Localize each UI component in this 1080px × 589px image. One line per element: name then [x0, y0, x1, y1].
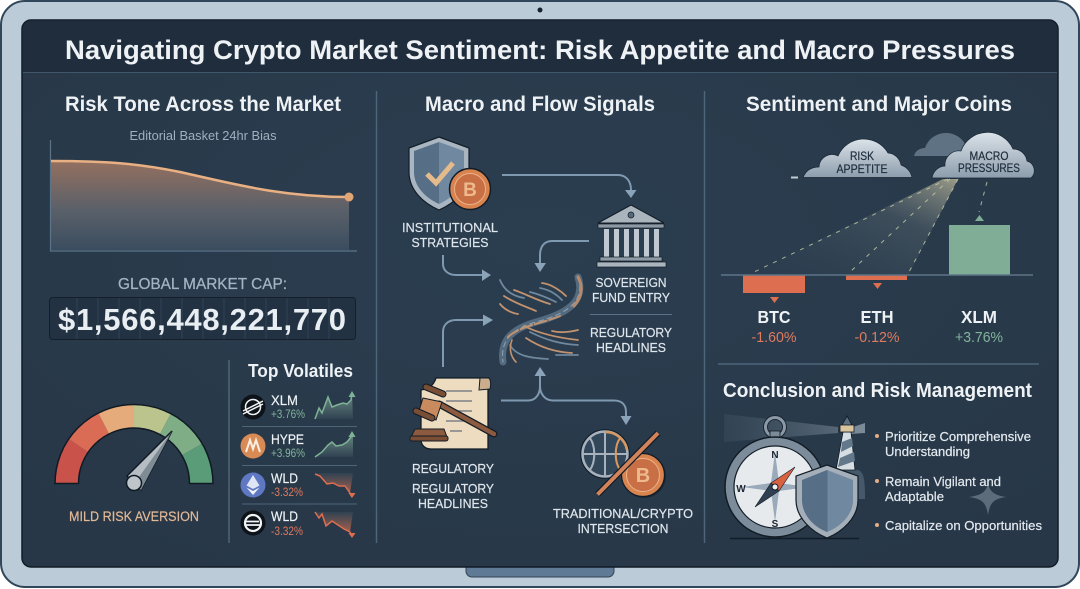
row: WLD globe icon: WLD [271, 508, 298, 524]
icon: shield with bitcoin [409, 137, 490, 210]
label: institutional strategies [402, 220, 498, 250]
coin: ETH [854, 307, 900, 346]
label: sovereign fund entry: FUND ENTRY [592, 290, 670, 305]
bullet list: Remain Vigilant and [885, 474, 1001, 489]
bullet list: Capitalize on Opportunities [885, 518, 1042, 533]
icon: cloud risk appetite: RISK [850, 151, 874, 163]
coin: BTC: -1.60% [752, 329, 796, 346]
heading: top volatiles: Top Volatiles [248, 361, 353, 381]
label: traditional/crypto intersection [553, 506, 693, 536]
chart subtitle: Editorial Basket 24hr Bias [130, 129, 276, 143]
gauge label: MILD RISK AVERSION [69, 509, 199, 524]
global market cap value: $1,566,448,221,770 [58, 302, 346, 337]
arrow: institutional to sovereign [502, 175, 636, 198]
heading: sentiment: Sentiment and Major Coins [746, 93, 1012, 116]
label: regulatory: REGULATORY [412, 461, 494, 476]
panel: risk tone across the market [50, 93, 357, 543]
bullet list: Understanding [885, 444, 970, 459]
icon: shield with bitcoin: B [463, 180, 477, 201]
row: XLM: XLM [271, 392, 298, 408]
coin: ETH: ETH [860, 307, 894, 327]
row: XLM: +3.76% [271, 409, 305, 421]
label: regulatory headlines (left) [412, 481, 494, 511]
icon: compass, lighthouse and shield [724, 414, 865, 538]
row: HYPE [240, 431, 356, 460]
gauge: mild risk aversion [55, 404, 213, 490]
label: traditional/crypto intersection: TRADITIONAL/CRYPTO [553, 506, 693, 521]
bullet list [875, 429, 1042, 533]
label: traditional/crypto intersection: INTERSECTION [578, 521, 668, 536]
label: regulatory headlines (right) [590, 325, 672, 355]
arrow: regulatory to center [443, 314, 493, 367]
arrow: sovereign to center [534, 241, 589, 272]
beam from macro cloud [750, 179, 958, 274]
decorative star mark [969, 484, 1006, 515]
heading: risk tone: Risk Tone Across the Market [65, 93, 341, 116]
icon: compass, lighthouse and shield: N [771, 450, 779, 461]
row: WLD ethereum icon: WLD [271, 470, 298, 486]
heading: macro and flow: Macro and Flow Signals [425, 93, 655, 116]
global market cap label: GLOBAL MARKET CAP: [118, 276, 287, 293]
row: WLD ethereum icon [240, 470, 356, 499]
arrow: regulatory to center and intersection [501, 367, 632, 425]
label: institutional strategies: STRATEGIES [412, 235, 489, 250]
coin: XLM: XLM [961, 307, 997, 327]
label: regulatory headlines (left): HEADLINES [418, 496, 488, 511]
label: regulatory headlines (right): REGULATORY [590, 325, 672, 340]
label: regulatory headlines (right): HEADLINES [596, 340, 666, 355]
row: WLD globe icon [240, 508, 356, 538]
icon: basketball and bitcoin slash: B [636, 465, 650, 487]
heading: conclusion: Conclusion and Risk Management [723, 380, 1032, 402]
area chart: 24hr bias [50, 140, 357, 251]
icon: cloud macro pressures [932, 132, 1034, 178]
icon: basketball and bitcoin slash [581, 430, 666, 498]
icon: cloud macro pressures: PRESSURES [958, 163, 1020, 175]
row: XLM [240, 391, 356, 421]
label: regulatory headlines (left): REGULATORY [412, 481, 494, 496]
label: sovereign fund entry: SOVEREIGN [596, 275, 666, 290]
icon: compass, lighthouse and shield: S [772, 519, 779, 530]
icon: cloud risk appetite: APPETITE [836, 164, 888, 176]
panel: sentiment and major coins [721, 93, 1034, 346]
panel: macro and flow signals [402, 93, 693, 536]
icon: cloud risk appetite [791, 139, 912, 178]
arrow: institutional to center [443, 255, 491, 281]
row: WLD ethereum icon: -3.32% [271, 487, 303, 499]
icon: cloud macro pressures: MACRO [970, 151, 1009, 163]
bullet list: Prioritize Comprehensive [885, 429, 1031, 444]
bar chart: coin moves [721, 215, 1033, 303]
label: sovereign fund entry [592, 275, 670, 305]
icon: gavel and scroll [410, 378, 494, 449]
icon: back cloud [914, 133, 975, 156]
coin: BTC: BTC [758, 307, 791, 327]
icon: compass, lighthouse and shield: W [736, 484, 746, 495]
dashed beam lines [752, 179, 987, 273]
panel: conclusion and risk management [723, 380, 1042, 538]
coin: XLM: +3.76% [955, 329, 1003, 346]
bullet list: Adaptable [885, 489, 944, 504]
row: WLD globe icon: -3.32% [271, 526, 303, 538]
coin: ETH: -0.12% [854, 329, 900, 346]
label: institutional strategies: INSTITUTIONAL [402, 220, 498, 235]
title: Navigating Crypto Market Sentiment: Risk Appetite and Macro Pressures [65, 35, 1015, 65]
coin: BTC [752, 307, 796, 346]
icon: bank building [597, 205, 666, 267]
coin: XLM [955, 307, 1003, 346]
row: HYPE: +3.96% [271, 448, 305, 460]
icon: flow swirl [500, 277, 581, 362]
row: HYPE: HYPE [271, 431, 304, 447]
